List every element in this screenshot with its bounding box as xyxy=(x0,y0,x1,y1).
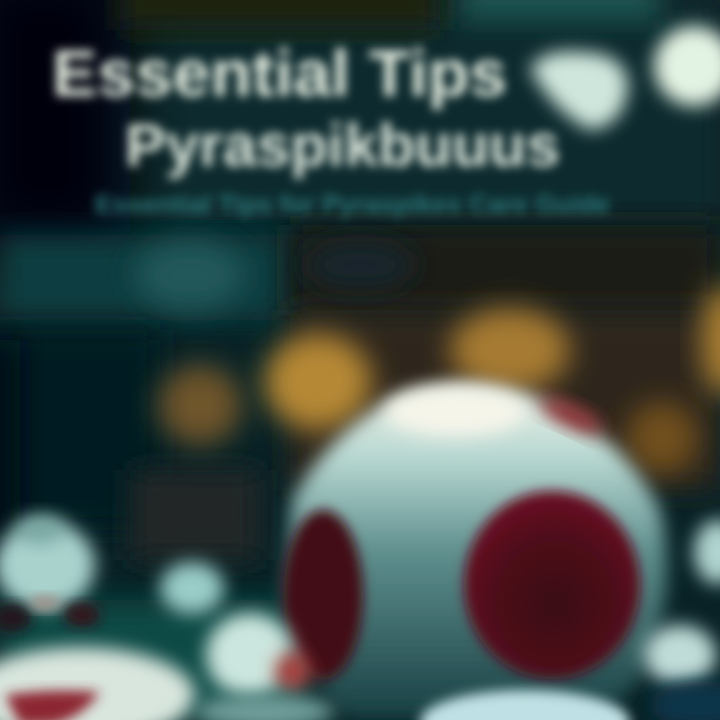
subtitle: Essential Tips for Pyraspikes Care Guide xyxy=(95,191,610,219)
small plush left xyxy=(0,516,100,632)
ball left eye xyxy=(283,510,363,680)
ball red top patch xyxy=(537,392,607,440)
title: Pyraspikbuuus xyxy=(125,112,560,179)
icon: glowing circle xyxy=(654,26,720,106)
icon: heart xyxy=(530,51,628,130)
plush bottom centre xyxy=(195,613,335,720)
bokeh lights xyxy=(158,284,720,474)
plush bottom left xyxy=(0,647,195,720)
small plush centre xyxy=(160,562,224,614)
large plush ball xyxy=(283,384,667,720)
ball white highlight xyxy=(385,388,525,436)
title xyxy=(52,36,560,179)
plush right edge xyxy=(644,520,720,720)
blurred teal panels behind heading xyxy=(135,241,415,309)
ball body xyxy=(285,384,667,720)
title: Essential Tips xyxy=(52,36,507,110)
ball right eye xyxy=(464,491,640,679)
plush bottom foreground xyxy=(420,690,630,720)
